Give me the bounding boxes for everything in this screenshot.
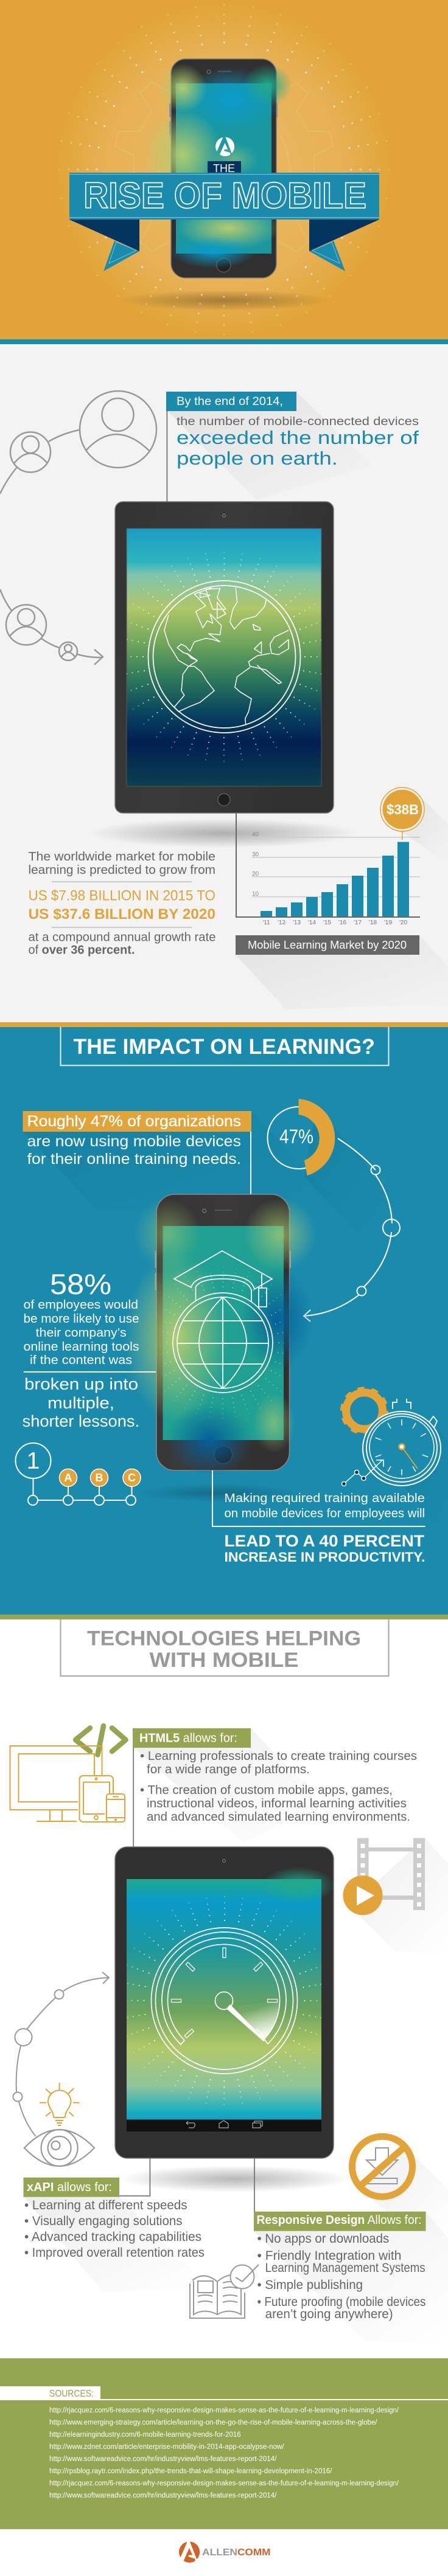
callout: HTML5: instructional videos, informal learning activities — [147, 1797, 407, 1810]
text block: 58 percent of employees: online learning tools — [23, 1340, 139, 1354]
bar chart: mobile learning market: '15 — [323, 919, 331, 926]
callout: HTML5: • Learning professionals to create training courses — [140, 1750, 417, 1763]
text block: 58 percent of employees: be more likely to use — [23, 1312, 139, 1326]
badge: $38B: $38B — [387, 802, 419, 817]
long shadow — [236, 935, 448, 1009]
source links: http://elearningindustry.com/6-mobile-learning-trends-for-2016 — [49, 2431, 241, 2439]
text block: market forecast: of over 36 percent. — [28, 944, 135, 957]
bar chart: mobile learning market: '13 — [293, 919, 301, 926]
caption: chart title: Mobile Learning Market by 2020 — [248, 939, 407, 951]
text block: 58 percent of employees: shorter lessons. — [23, 1412, 139, 1430]
source links: http://www.softwareadvice.com/hr/industryview/lms-features-report-2014/ — [49, 2492, 277, 2499]
callout: devices exceed people: By the end of 2014, — [177, 395, 283, 408]
badge: $38B — [380, 788, 424, 840]
callout: HTML5: • The creation of custom mobile apps, games, — [140, 1784, 393, 1797]
callout: devices exceed people: the number of mobile-connected devices — [177, 415, 419, 428]
arrow: progress path to phone — [304, 1138, 400, 1321]
callout: HTML5: HTML5 allows for: — [139, 1732, 237, 1745]
bar chart: mobile learning market: '16 — [338, 919, 346, 926]
callout: responsive design: • Friendly Integration with — [257, 2249, 402, 2263]
footer logo: AllenComm — [179, 2542, 270, 2563]
callout: xAPI: • Advanced tracking capabilities — [24, 2230, 201, 2244]
bar chart: mobile learning market: '17 — [354, 919, 362, 926]
icon: graduation cap on globe — [173, 1251, 273, 1393]
icon: open book with check — [190, 2265, 259, 2318]
callout: responsive design: Learning Management Systems — [265, 2261, 425, 2275]
callout: HTML5: and advanced simulated learning environments. — [147, 1810, 410, 1824]
icon: lesson chain 1 A B C: A — [65, 1472, 72, 1484]
panel: technologies helping with mobile — [0, 1615, 448, 2358]
smartphone with graduation globe — [125, 1194, 317, 1477]
donut chart: 47 percent — [268, 1099, 335, 1175]
text block: 58 percent of employees: of employees would — [23, 1298, 138, 1312]
bar chart: mobile learning market: 40 — [252, 831, 259, 838]
text block: 58 percent of employees: broken up into — [24, 1375, 138, 1393]
callout: devices exceed people: people on earth. — [177, 448, 338, 469]
panel: global devices and market — [0, 344, 448, 1022]
tablet with speedometer — [115, 1847, 335, 2158]
heading: technologies helping with mobile: WITH MOBILE — [150, 1649, 298, 1672]
icon: monitor, tablet and phone — [10, 1746, 125, 1822]
heading: the impact on learning — [61, 1027, 388, 1065]
panel: the impact on learning — [0, 1022, 448, 1615]
callout: productivity increase: INCREASE IN PRODUCTIVITY. — [224, 1549, 425, 1565]
footer logo: AllenComm: COMM — [237, 2547, 270, 2558]
icon: eye — [24, 2130, 94, 2166]
callout: responsive design: Responsive Design Allows for: — [257, 2214, 421, 2227]
callout: devices exceed people: exceeded the number of — [177, 427, 419, 448]
bar chart: mobile learning market: '11 — [262, 919, 270, 926]
icon: lesson chain 1 A B C: B — [95, 1472, 103, 1484]
icon: gear and stopwatch — [342, 1389, 441, 1486]
icon: film strip with play button — [343, 1838, 425, 1915]
long shadow — [23, 1111, 341, 1210]
callout: productivity increase: LEAD TO A 40 PERCENT — [224, 1532, 425, 1550]
text block: 58 percent of employees: if the content was — [30, 1354, 132, 1367]
source links: http://rpsblog.raytr.com/index.php/the-trends-that-will-shape-learning-development-in-2016/ — [49, 2468, 332, 2475]
source links: http://rjacquez.com/6-reasons-why-responsive-design-makes-sense-as-the-future-of-e-learning-m-learning-design/ — [49, 2407, 399, 2414]
source links: http://www.softwareadvice.com/hr/industryview/lms-features-report-2014/ — [49, 2456, 277, 2463]
callout: responsive design: aren’t going anywhere) — [265, 2307, 393, 2321]
label: THE — [208, 161, 241, 175]
heading: technologies helping with mobile — [61, 1619, 388, 1676]
heading: sources — [0, 2386, 100, 2400]
callout: xAPI — [23, 2158, 205, 2260]
smartphone — [143, 59, 292, 278]
bar chart: mobile learning market: '20 — [399, 919, 407, 926]
bar chart: mobile learning market: 20 — [252, 871, 259, 878]
callout: responsive design: • Simple publishing — [257, 2278, 363, 2292]
icon: lesson chain 1 A B C — [16, 1443, 141, 1505]
callout: 47 percent of organizations: for their online training needs. — [27, 1151, 241, 1168]
long shadow — [402, 1417, 448, 1531]
android navigation icons — [186, 2121, 262, 2128]
bar chart: mobile learning market: 30 — [252, 851, 259, 858]
long shadow — [167, 392, 371, 500]
callout: 47 percent of organizations — [23, 1111, 251, 1194]
long shadow — [362, 2147, 448, 2238]
phone shadow — [135, 1484, 299, 1502]
icon: lesson chain 1 A B C: C — [128, 1472, 136, 1484]
callout: productivity increase: Making required training available — [224, 1492, 425, 1505]
icon: light bulb — [40, 2083, 79, 2125]
heading: sources: SOURCES: — [49, 2389, 94, 2399]
long shadow — [254, 2212, 448, 2341]
text block: 58 percent of employees: their company’s — [36, 1326, 127, 1340]
source links: http://www.zdnet.com/article/enterprise-mobility-in-2014-app-ocalypse-now/ — [49, 2443, 284, 2451]
bar chart: mobile learning market: '12 — [278, 919, 285, 926]
panel: hero header — [0, 0, 448, 344]
arrow: progress path to tablet — [13, 1972, 109, 2136]
long shadow — [304, 1107, 390, 1234]
callout: xAPI: • Learning at different speeds — [24, 2198, 187, 2212]
text block: 58 percent of employees — [23, 1268, 156, 1430]
long shadow — [350, 1838, 448, 1952]
icon: AllenComm logo mark — [215, 137, 234, 156]
caption: chart title — [236, 935, 419, 955]
callout: HTML5 — [133, 1728, 417, 1847]
callout: xAPI: • Improved overall retention rates — [24, 2246, 205, 2260]
callout: productivity increase: on mobile devices for employees will — [224, 1507, 425, 1520]
bar chart: mobile learning market: 10 — [252, 891, 259, 898]
heading: the impact on learning: THE IMPACT ON LEARNING? — [73, 1035, 375, 1059]
callout: HTML5: for a wide range of platforms. — [147, 1763, 310, 1776]
icon: lesson chain 1 A B C: 1 — [27, 1448, 40, 1474]
callout: responsive design: • No apps or downloads — [257, 2232, 389, 2246]
long shadow — [23, 2197, 207, 2293]
text block: market forecast: US $7.98 BILLION IN 2015 TO — [28, 888, 215, 904]
text block: market forecast — [28, 850, 215, 957]
tablet shadow — [119, 2166, 350, 2192]
footer logo: AllenComm: ALLEN — [202, 2547, 237, 2558]
text block: market forecast: learning is predicted to grow from — [28, 864, 215, 877]
bar chart: mobile learning market: '14 — [308, 919, 316, 926]
long shadow — [133, 1728, 323, 1843]
icon: speedometer gauge — [151, 1928, 297, 2074]
icon: connected people network — [0, 391, 156, 665]
icon: no downloads — [352, 2136, 413, 2197]
label: THE: THE — [213, 162, 235, 175]
callout: xAPI: xAPI allows for: — [27, 2181, 112, 2194]
ribbon tails — [69, 220, 379, 271]
text block: market forecast: The worldwide market for mobile — [28, 850, 215, 864]
donut chart: 47 percent: 47% — [279, 1126, 313, 1148]
bar chart: mobile learning market: '18 — [369, 919, 377, 926]
callout: responsive design — [254, 2158, 426, 2321]
long shadow — [402, 794, 448, 864]
callout: responsive design: • Future proofing (mobile devices — [257, 2295, 426, 2309]
bar chart: mobile learning market — [236, 813, 420, 926]
text block: 58 percent of employees: multiple, — [47, 1394, 114, 1412]
tablet shadow — [89, 819, 357, 848]
callout: xAPI: • Visually engaging solutions — [24, 2214, 183, 2228]
callout: productivity increase — [212, 1470, 425, 1565]
source links: http://www.emerging-strategy.com/article/learning-on-the-go-the-rise-of-mobile-learning-across-the-globe/ — [49, 2419, 377, 2426]
source links — [49, 2407, 399, 2499]
bar chart: mobile learning market: '19 — [384, 919, 392, 926]
title ribbon: RISE OF MOBILE — [83, 175, 366, 216]
panel: sources — [0, 2358, 448, 2529]
callout: 47 percent of organizations: Roughly 47% of organizations — [27, 1113, 241, 1130]
text block: market forecast: US $37.6 BILLION BY 2020 — [28, 906, 215, 923]
callout: 47 percent of organizations: are now using mobile devices — [27, 1133, 241, 1150]
icon: globe — [149, 581, 301, 733]
heading: technologies helping with mobile: TECHNOLOGIES HELPING — [87, 1627, 361, 1650]
text block: 58 percent of employees: 58% — [50, 1268, 111, 1300]
phone shadow — [118, 290, 331, 311]
tablet with globe — [115, 502, 334, 813]
text block: market forecast: at a compound annual growth rate — [28, 930, 215, 944]
callout: devices exceed people — [166, 392, 419, 502]
source links: http://rjacquez.com/6-reasons-why-responsive-design-makes-sense-as-the-future-of-e-learning-m-learning-design/ — [49, 2480, 399, 2487]
icon: code brackets — [75, 1726, 125, 1755]
